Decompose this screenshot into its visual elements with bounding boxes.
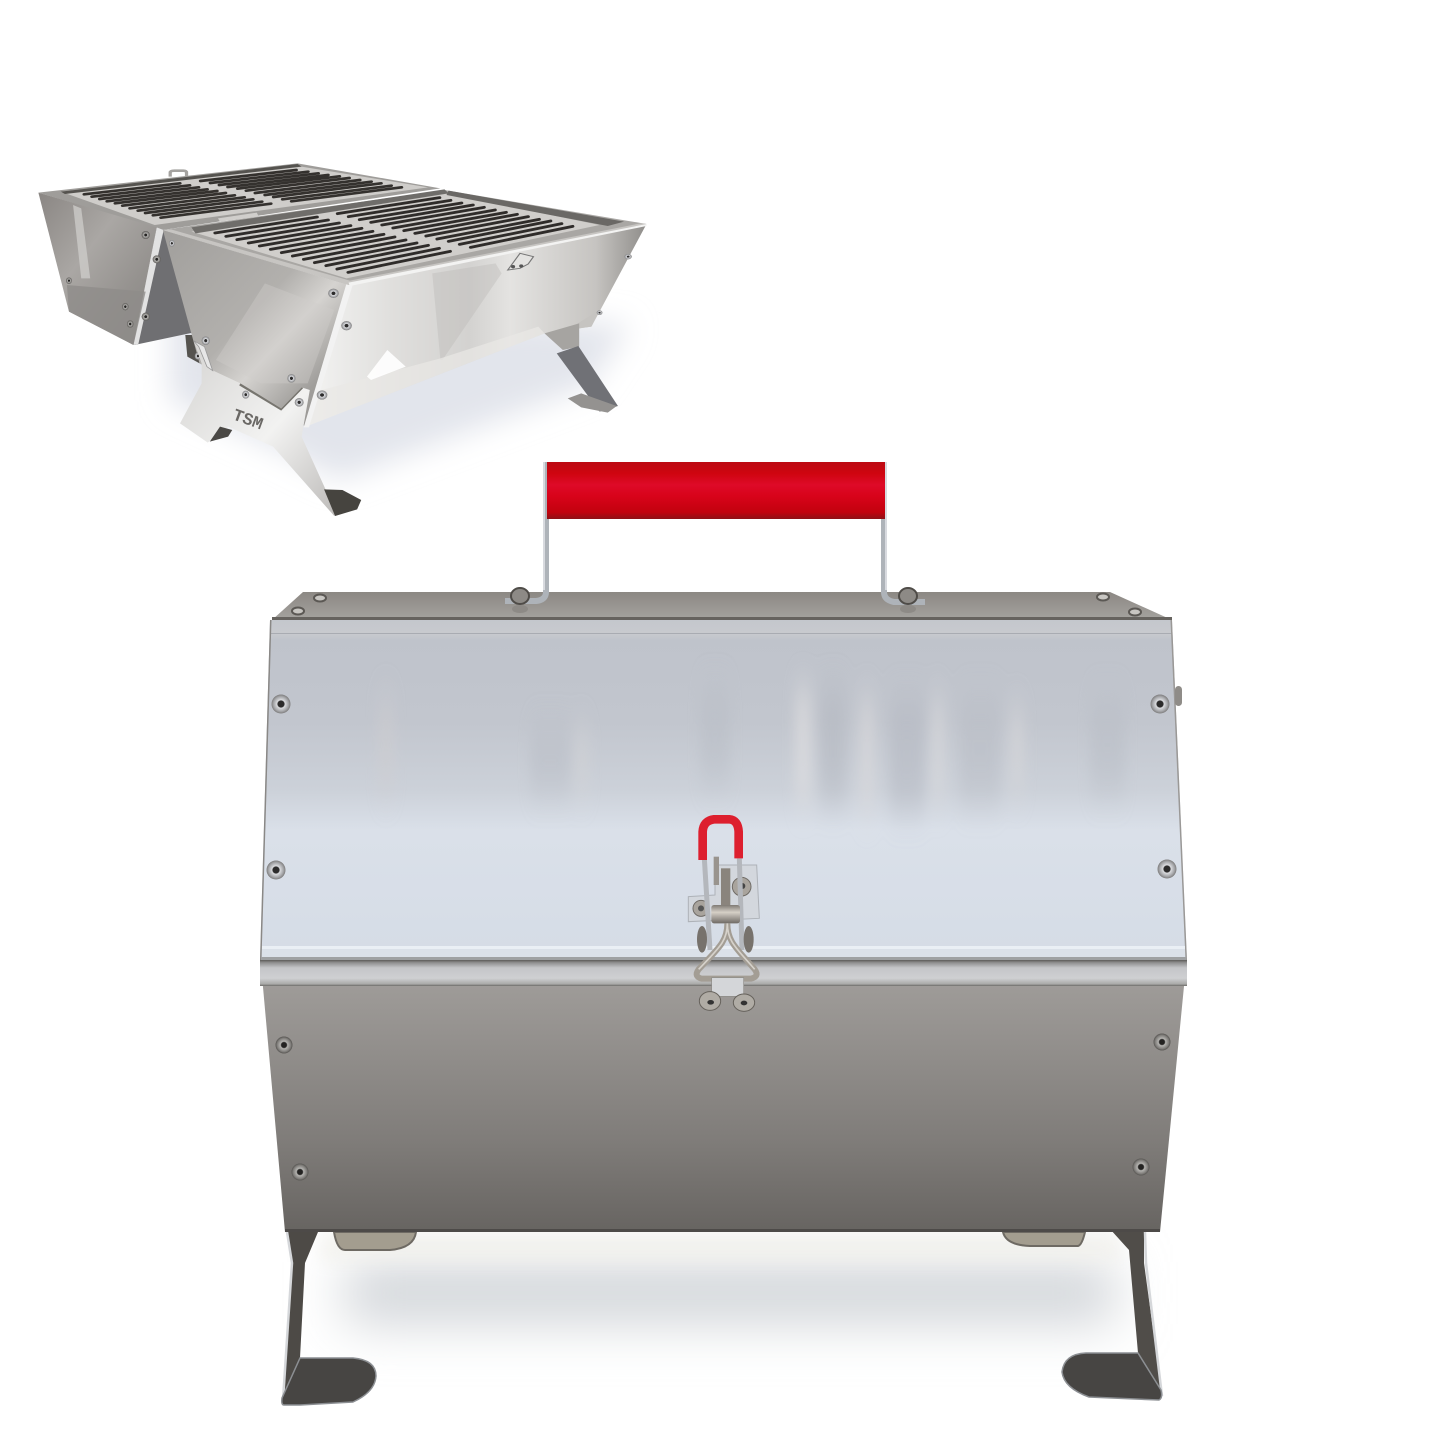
- lid face: [260, 620, 1187, 960]
- lid brushed streaks: [378, 690, 1125, 810]
- left half: grate: [61, 164, 428, 225]
- main grill: closed view: [260, 462, 1187, 1405]
- left foot: [282, 1358, 376, 1405]
- latch base plate: [688, 865, 759, 922]
- lower body panel: [262, 976, 1185, 1232]
- rear rubber feet: [334, 1232, 1085, 1250]
- right foot: [1062, 1353, 1162, 1400]
- right half: top rim: [163, 223, 647, 285]
- handle straps: [505, 462, 925, 613]
- red grip: [547, 462, 885, 519]
- right half: hinge bar: [218, 213, 259, 222]
- right half: rivets: [169, 240, 632, 400]
- hinge rail: [260, 960, 1187, 986]
- red rubber grip: [703, 819, 739, 860]
- barrel: [711, 905, 740, 923]
- side hinges: [697, 926, 754, 953]
- front leg: [180, 341, 361, 516]
- toggle latch: [688, 819, 759, 1011]
- body rivets: [276, 1034, 1170, 1180]
- left half: lock tab: [170, 171, 187, 177]
- far foot: [185, 335, 200, 363]
- small grill: open view: [38, 163, 647, 516]
- right half: long side panel: [306, 224, 647, 427]
- lid rivets: [266, 694, 1176, 880]
- left leg: [282, 1160, 376, 1405]
- main floor shadow: [320, 1232, 1120, 1324]
- lever arms: [704, 858, 742, 950]
- right leg: [1062, 1160, 1162, 1400]
- side knob: [1175, 686, 1182, 706]
- right half: grate: [191, 189, 624, 278]
- threaded rod: [721, 868, 730, 908]
- keeper strap: [712, 978, 744, 996]
- bottom rivets: [699, 992, 755, 1011]
- left half: tray: [38, 163, 440, 345]
- lid top plate: [272, 592, 1172, 620]
- embossed logo TSM: TSM: [230, 407, 265, 435]
- right half: latch: [508, 253, 533, 270]
- rear leg: [544, 323, 618, 413]
- red carry handle: [505, 462, 925, 613]
- right half: body: [163, 190, 647, 427]
- small grill floor shadow: [170, 300, 630, 480]
- plate screws: [693, 877, 751, 916]
- right half: end panel: [163, 230, 349, 427]
- wire loop: [697, 923, 757, 979]
- leg feet: [324, 489, 361, 516]
